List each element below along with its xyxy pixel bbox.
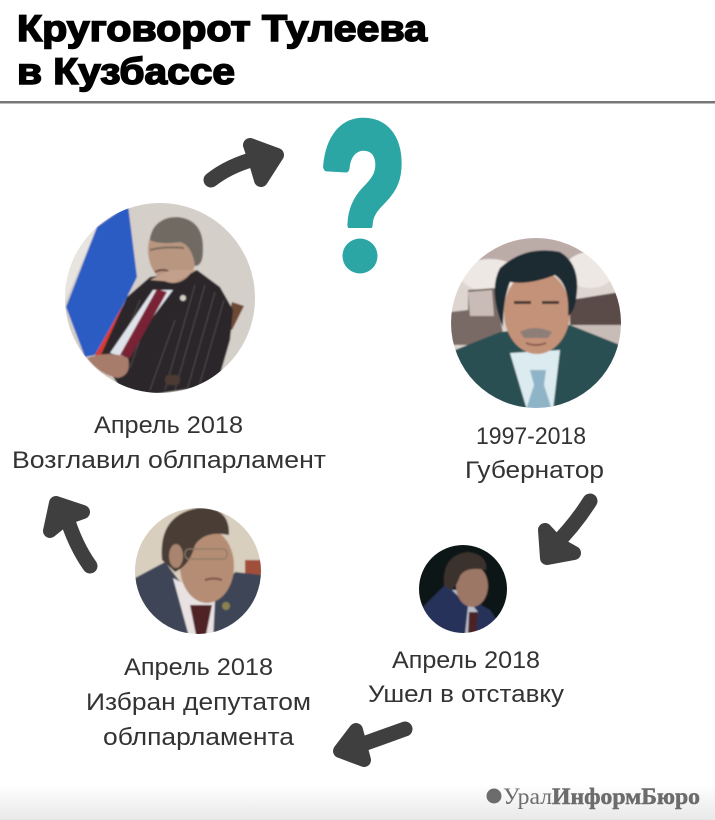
label: April 2018 elected deputy: облпарламента bbox=[103, 724, 295, 751]
label: April 2018 elected deputy bbox=[86, 654, 311, 751]
arrow: to question mark bbox=[211, 145, 277, 180]
label: 1997-2018 governor: Губернатор bbox=[465, 457, 604, 484]
question mark bbox=[323, 118, 402, 274]
title bbox=[17, 8, 427, 92]
arrow: resignation to elected deputy bbox=[340, 729, 405, 760]
label: April 2018 resigned bbox=[368, 647, 564, 708]
title: Круговорот Тулеева bbox=[17, 8, 427, 49]
label: 1997-2018 governor: 1997-2018 bbox=[476, 423, 586, 450]
portrait: resignation bbox=[419, 545, 507, 633]
label: April 2018 headed parliament: Возглавил облпарламент bbox=[12, 447, 326, 474]
label: April 2018 elected deputy: Апрель 2018 bbox=[124, 654, 273, 681]
watermark logo: УралИнформБюро bbox=[503, 784, 700, 809]
label: April 2018 headed parliament bbox=[12, 412, 326, 474]
portrait: governor bbox=[451, 238, 621, 408]
arrow: elected deputy to chair bbox=[50, 503, 90, 566]
portrait: chair of regional parliament bbox=[60, 200, 260, 400]
label: April 2018 elected deputy: Избран депутатом bbox=[86, 689, 311, 716]
label: April 2018 resigned: Апрель 2018 bbox=[392, 647, 540, 674]
label: April 2018 headed parliament: Апрель 2018 bbox=[94, 412, 243, 439]
title: в Кузбассе bbox=[17, 51, 235, 92]
question mark: ? bbox=[320, 80, 406, 312]
label: 1997-2018 governor bbox=[465, 423, 604, 484]
arrow: governor to resignation bbox=[545, 501, 590, 558]
label: April 2018 resigned: Ушел в отставку bbox=[368, 681, 564, 708]
portrait: elected deputy bbox=[135, 508, 261, 634]
